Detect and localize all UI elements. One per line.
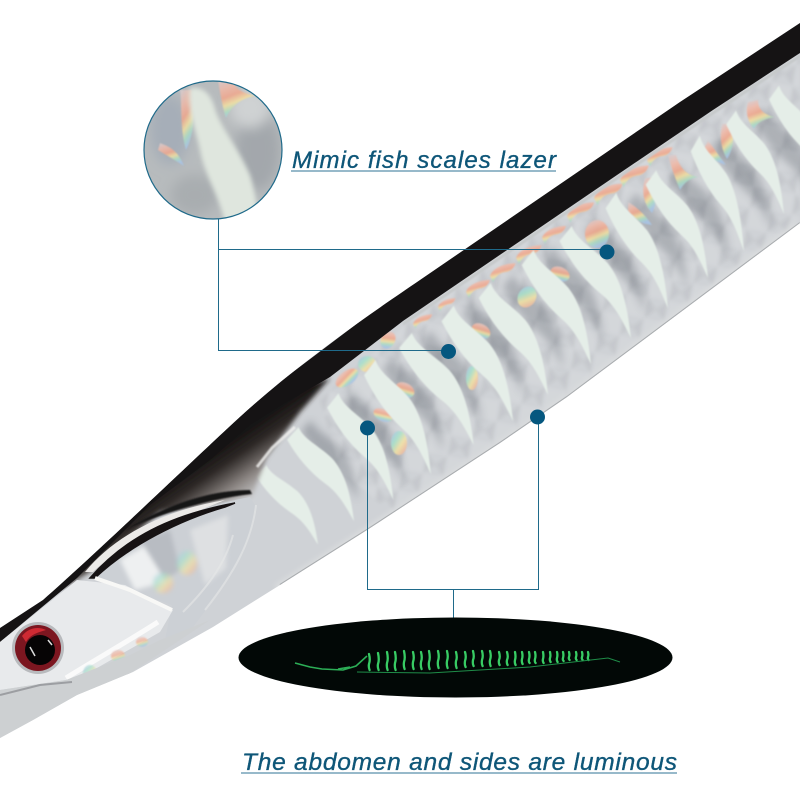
head plate iridescent scales xyxy=(120,515,228,593)
cheek xyxy=(0,580,173,690)
black shoulder gradient xyxy=(60,378,330,590)
panel: luminous lure in the dark xyxy=(238,618,672,698)
heading text: Mimic fish scales lazer xyxy=(292,147,557,174)
heading text: The abdomen and sides are luminous xyxy=(242,749,677,776)
leader to upper dot xyxy=(218,219,607,350)
glowing belly line xyxy=(357,658,620,673)
black gill line xyxy=(90,503,235,578)
callout lines: scale points xyxy=(218,219,607,350)
black back band xyxy=(0,20,800,642)
dot: abdomen marker xyxy=(530,410,545,424)
shoulder sparkle xyxy=(257,427,295,467)
head plate inner rim xyxy=(183,505,256,612)
icon: red eye xyxy=(12,622,64,674)
dot: upper scale marker xyxy=(600,244,614,260)
head plate xyxy=(214,497,250,506)
dark ellipse xyxy=(238,618,672,698)
cheek ridge xyxy=(95,578,172,610)
jaw rainbow spots xyxy=(82,636,148,674)
red iris xyxy=(15,625,61,671)
laser rainbow patches xyxy=(332,100,774,455)
callout lines: luminous points xyxy=(368,417,538,618)
iris highlight xyxy=(22,628,46,642)
holographic scale pattern xyxy=(322,71,798,504)
pale line under the back band xyxy=(403,56,800,324)
heading underline xyxy=(241,772,677,774)
eye ring xyxy=(12,622,64,674)
lower jaw xyxy=(0,658,130,738)
glow-paint S stripes xyxy=(256,86,800,545)
magnified glow stripe xyxy=(189,88,260,228)
belly outline xyxy=(280,223,800,585)
jaw iridescent strip xyxy=(66,622,158,678)
glowing head outline xyxy=(295,656,367,670)
callout: zoomed scale circle xyxy=(144,78,282,228)
circle outline xyxy=(144,81,282,219)
pale belly edge xyxy=(280,232,800,594)
darker scale shading xyxy=(301,106,800,501)
shaded scales xyxy=(150,88,280,215)
magnified rainbow marks xyxy=(158,78,255,166)
upper dark gill line xyxy=(125,490,252,530)
mouth line xyxy=(0,682,72,695)
circle backdrop xyxy=(144,81,282,219)
dot: side marker xyxy=(360,420,375,436)
glowing stripes xyxy=(369,651,589,670)
heading underline xyxy=(291,170,556,172)
zoomed scale detail xyxy=(150,78,280,228)
pupil xyxy=(25,635,55,665)
pupil glint xyxy=(30,640,52,656)
dot: middle scale marker xyxy=(441,344,456,359)
white cheek streak xyxy=(85,500,225,572)
